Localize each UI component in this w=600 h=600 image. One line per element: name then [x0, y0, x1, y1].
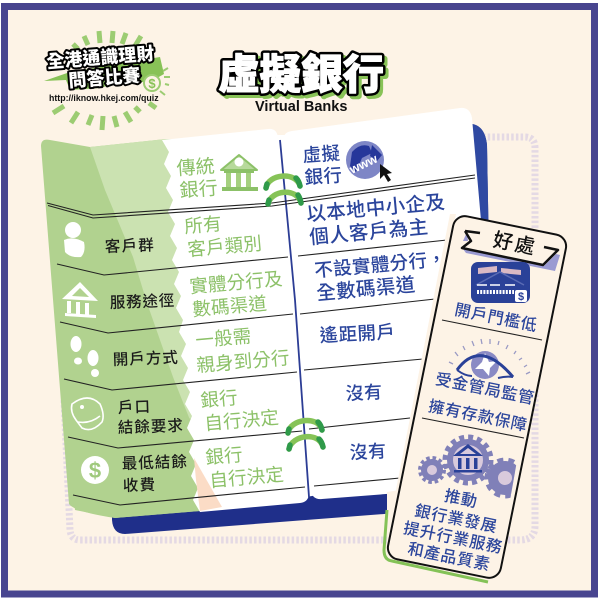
- row: account opening: [70, 321, 396, 377]
- row: account opening: 遙距開戶: [319, 321, 396, 346]
- benefit: industry development: 推動: [443, 487, 479, 511]
- row: service channels: [62, 248, 447, 320]
- row: account opening: 一般需: [195, 325, 252, 351]
- title: 虛擬銀行: [221, 54, 387, 101]
- binder rings: bottom: [288, 420, 323, 449]
- row: minimum fee: 收費: [123, 476, 157, 495]
- row: customers: 客戶類別: [187, 233, 263, 260]
- navy cover: [112, 124, 500, 534]
- card green edge: [384, 510, 488, 582]
- icon: eye: [449, 339, 530, 379]
- row: customers: 個人客戶為主: [308, 216, 429, 249]
- title: 虛擬銀行: [218, 51, 384, 98]
- dashed backdrop frame: [64, 137, 535, 540]
- row: customers: 客戶群: [104, 235, 155, 256]
- row: minimum balance: 沒有: [345, 382, 383, 404]
- row: minimum fee: 自行決定: [209, 464, 285, 491]
- icon: person: [64, 222, 85, 257]
- icon: footprints: [70, 336, 99, 377]
- competition badge: http://iknow.hkej.com/quiz: [49, 93, 159, 103]
- row: minimum balance: 結餘要求: [117, 416, 184, 437]
- column header: virtual bank: [302, 141, 392, 188]
- icon: dollar coin: [81, 456, 109, 484]
- row: minimum fee: 銀行: [205, 444, 244, 468]
- book: [41, 108, 500, 534]
- column header: traditional bank: [176, 155, 258, 202]
- row: customers: 所有: [184, 213, 223, 237]
- row: customers: [64, 191, 446, 260]
- title: Virtual Banks: [255, 99, 347, 115]
- benefits card: [384, 214, 568, 582]
- benefit: industry development: 提升行業服務: [402, 519, 504, 557]
- row lines: [47, 175, 475, 505]
- benefit: low threshold: 開戶門檻低: [453, 301, 539, 335]
- binder rings: top: [266, 176, 301, 204]
- benefit: deposit protection: 受金管局監管: [434, 369, 536, 408]
- row: customers: 以本地中小企及: [305, 191, 446, 226]
- icon: gears: [420, 437, 523, 496]
- icon: dollar coin: $: [89, 458, 101, 483]
- white left page: [162, 129, 309, 512]
- row: service channels: 數碼渠道: [192, 293, 268, 320]
- benefit: deposit protection: 擁有存款保障: [427, 397, 529, 435]
- gutter backing: [270, 135, 318, 498]
- row: minimum fee: [81, 441, 387, 495]
- peach corner: [194, 458, 222, 511]
- row: service channels: 全數碼渠道: [315, 274, 417, 305]
- competition badge: [44, 31, 170, 130]
- row: minimum fee: 最低結餘: [121, 452, 188, 473]
- row: service channels: 實體分行及: [189, 268, 284, 297]
- column header: virtual bank: 虛擬: [302, 142, 341, 166]
- row: minimum balance: 戶口: [118, 398, 152, 417]
- spine line: [280, 140, 309, 497]
- ribbon heading: [462, 228, 560, 271]
- ribbon heading: 好處: [491, 228, 539, 259]
- competition badge: 問答比賽: [68, 64, 141, 91]
- benefit: industry development: [402, 437, 523, 574]
- icon: piggy bank: [72, 398, 103, 430]
- benefit: low threshold: [453, 262, 539, 335]
- title: 虛擬銀行: [218, 51, 384, 98]
- green side panel: [41, 139, 200, 518]
- benefit: industry development: 銀行業發展: [413, 502, 499, 536]
- row: account opening: 開戶方式: [112, 348, 179, 369]
- competition badge: 全港通識理財: [46, 43, 155, 72]
- column header: virtual bank: 銀行: [304, 164, 343, 188]
- row: minimum balance: 銀行: [200, 387, 239, 411]
- icon: bank: [221, 155, 258, 191]
- icon: globe: www: [346, 152, 380, 177]
- benefit: deposit protection: [427, 339, 536, 435]
- icon: bank outline: [62, 282, 98, 318]
- icon: card: $: [518, 291, 524, 303]
- row: minimum balance: [72, 382, 383, 437]
- small dollar sun: $: [148, 76, 156, 91]
- row: minimum balance: 自行決定: [204, 407, 280, 434]
- column header: traditional bank: 銀行: [179, 177, 219, 202]
- row: service channels: 服務途徑: [109, 291, 175, 312]
- benefit: industry development: 和產品質素: [406, 540, 492, 574]
- column header: traditional bank: 傳統: [176, 155, 216, 180]
- row: service channels: 不設實體分行，: [313, 248, 447, 281]
- white right page: [284, 108, 488, 499]
- card halo: [387, 214, 456, 556]
- row: account opening: 親身到分行: [196, 347, 291, 376]
- row: minimum fee: 沒有: [349, 441, 387, 463]
